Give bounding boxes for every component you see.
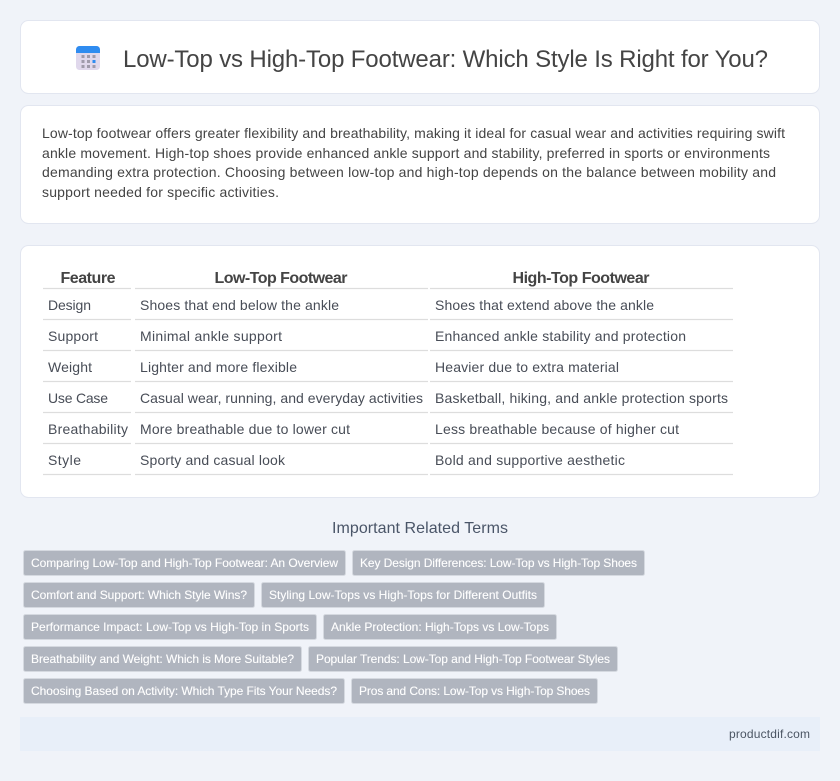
row: breathability [48, 421, 679, 437]
panel: intro [20, 106, 820, 224]
related term tags: Styling Low-Tops vs High-Tops for Different Outfits [269, 588, 537, 602]
heading: related terms: Important Related Terms [332, 520, 508, 537]
related term tags: Key Design Differences: Low-Top vs High-Top Shoes [360, 556, 637, 570]
icon: calendar [76, 46, 100, 70]
row: weight: Heavier due to extra material [435, 359, 619, 375]
related term tags: Comfort and Support: Which Style Wins? [31, 588, 247, 602]
row: support: Minimal ankle support [140, 328, 282, 344]
related term tags: Comparing Low-Top and High-Top Footwear: An Overview [31, 556, 338, 570]
row: use case: Use Case [48, 390, 108, 406]
title text: Low-Top vs High-Top Footwear: Which Style Is Right for You? [123, 46, 768, 73]
row: style: Style [48, 452, 81, 468]
row: style: Sporty and casual look [140, 452, 286, 468]
table header: High-Top Footwear [512, 270, 650, 287]
row: weight: Weight [48, 359, 92, 375]
row: support: Enhanced ankle stability and protection [435, 328, 686, 344]
intro text: Low-top footwear offers greater flexibility and breathability, making it ideal for casual wear and activities requiring swift [42, 125, 785, 141]
intro text: support needed for specific activities. [42, 184, 279, 200]
row: use case [48, 390, 728, 406]
footer: productdif.com [729, 727, 810, 741]
related term tags: Ankle Protection: High-Tops vs Low-Tops [331, 620, 549, 634]
row: weight: Lighter and more flexible [140, 359, 297, 375]
row: use case: Casual wear, running, and everyday activities [140, 390, 423, 406]
row: design [48, 297, 654, 313]
panel: comparison table [20, 246, 820, 498]
related term tags: Pros and Cons: Low-Top vs High-Top Shoes [359, 684, 590, 698]
row: breathability: Less breathable because of higher cut [435, 421, 679, 437]
table header: Low-Top Footwear [214, 270, 348, 287]
row: use case: Basketball, hiking, and ankle protection sports [435, 390, 728, 406]
related term tags: Choosing Based on Activity: Which Type Fits Your Needs? [31, 684, 337, 698]
row: style [48, 452, 625, 468]
row: design: Design [48, 297, 91, 313]
table header: Feature [60, 270, 116, 287]
intro text: demanding extra protection. Choosing between low-top and high-top depends on the balance between mobility and [42, 164, 776, 180]
row: breathability: Breathability [48, 421, 128, 437]
intro text [42, 125, 785, 200]
table header [60, 270, 650, 287]
related term tags [24, 550, 644, 704]
panel: title [20, 20, 820, 94]
related term tags: Breathability and Weight: Which is More Suitable? [31, 652, 294, 666]
footer [20, 717, 820, 751]
row: support [48, 328, 686, 344]
related term tags: Popular Trends: Low-Top and High-Top Footwear Styles [316, 652, 610, 666]
row: breathability: More breathable due to lower cut [140, 421, 350, 437]
intro text: ankle movement. High-top shoes provide enhanced ankle support and stability, preferred in sports or environments [42, 145, 770, 161]
row: design: Shoes that end below the ankle [140, 297, 339, 313]
row: design: Shoes that extend above the ankle [435, 297, 654, 313]
row: support: Support [48, 328, 98, 344]
related term tags: Performance Impact: Low-Top vs High-Top in Sports [31, 620, 309, 634]
row: style: Bold and supportive aesthetic [435, 452, 625, 468]
row: weight [48, 359, 619, 375]
